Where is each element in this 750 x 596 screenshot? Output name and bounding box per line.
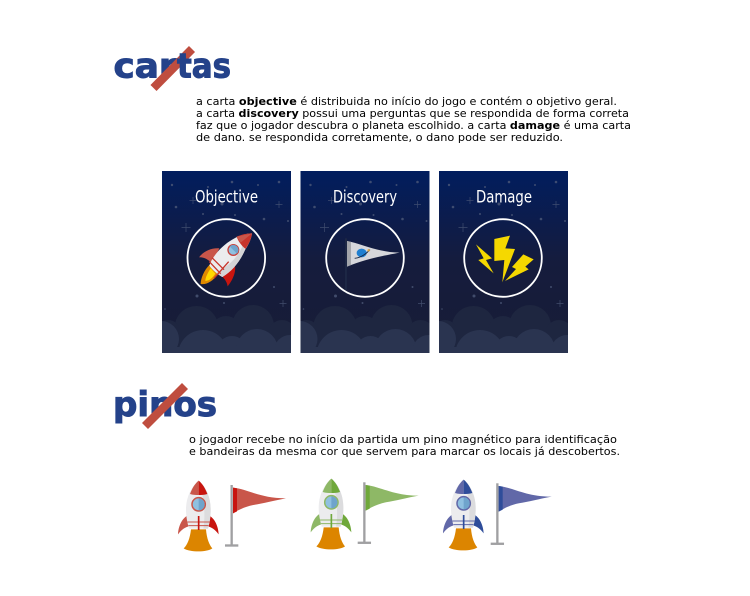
card: Damage: [420, 171, 583, 380]
flag: blue: [491, 483, 552, 545]
icon: lightning bolts: [476, 236, 534, 282]
pin: green rocket: [311, 479, 351, 549]
pin: blue rocket: [443, 480, 484, 550]
icon: rocket: [199, 233, 252, 286]
flag: green: [358, 482, 419, 544]
text block: pinos description: e bandeiras da mesma cor que servem para marcar os locais já descobertos.: [189, 446, 620, 458]
pin: red rocket: [178, 481, 219, 551]
text block: pinos description: [189, 434, 620, 458]
heading: pinos: pinos: [113, 385, 217, 425]
card title: Discovery: Discovery: [333, 188, 397, 206]
icon: flag with planet: [345, 238, 400, 290]
text block: cartas description: faz que o jogador descubra o planeta escolhido. a carta damage é uma carta: [196, 120, 631, 132]
text block: pinos description: o jogador recebe no início da partida um pino magnético para identificação: [189, 434, 617, 446]
icon ring: Damage: [464, 219, 542, 297]
icon ring: Discovery: [326, 219, 404, 297]
card: Discovery: [282, 171, 444, 380]
text block: cartas description: [196, 96, 631, 144]
text block: cartas description: de dano. se respondida corretamente, o dano pode ser reduzido.: [196, 132, 563, 144]
text block: cartas description: a carta objective é distribuida no início do jogo e contém o objetivo geral.: [196, 96, 617, 108]
strike-through: pinos: [145, 386, 185, 426]
text block: cartas description: a carta discovery possui uma perguntas que se respondida de forma correta: [196, 108, 629, 120]
strike-through: cartas: [154, 49, 192, 88]
heading: cartas: car: [114, 46, 177, 86]
icon ring: Objective: [188, 219, 265, 297]
card title: Damage: Damage: [476, 188, 532, 206]
card title: Objective: Objective: [195, 188, 258, 206]
flag: red: [225, 485, 286, 547]
card: Objective: [143, 171, 306, 380]
heading: cartas: tas: [177, 46, 231, 86]
heading: cartas: [114, 46, 231, 88]
